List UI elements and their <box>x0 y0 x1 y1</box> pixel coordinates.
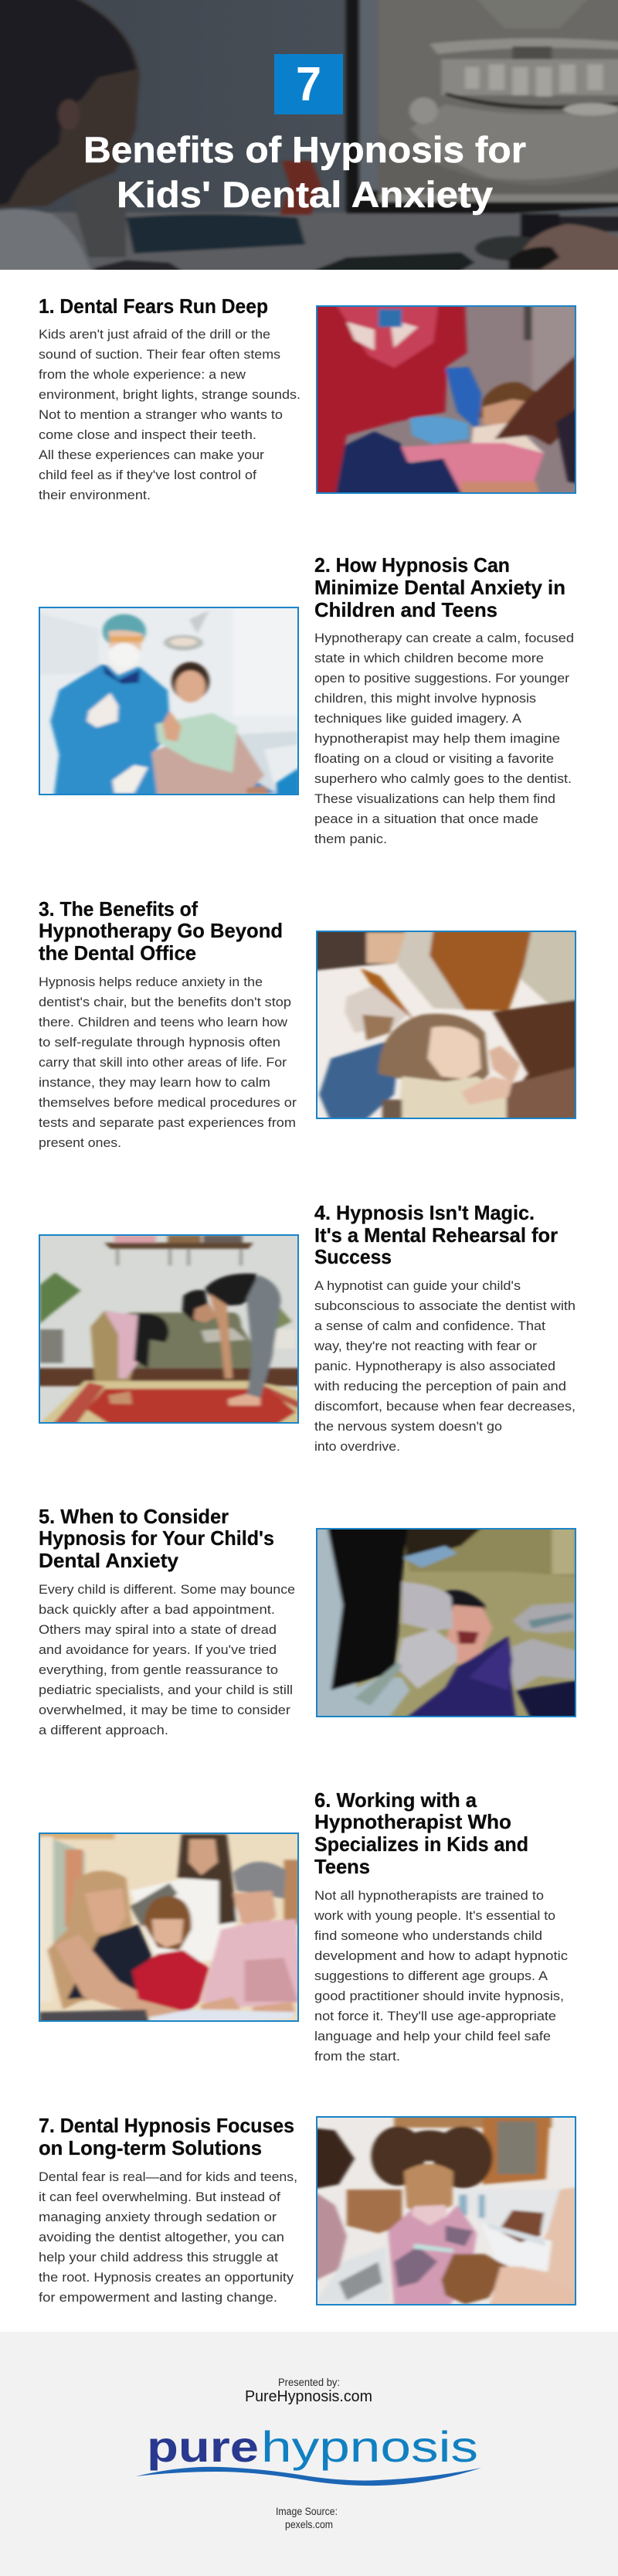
logo: pure hypnosis: pure <box>147 2422 259 2471</box>
section 3 <box>39 897 583 1150</box>
body text 6: development and how to adapt hypnotic <box>314 1948 569 1963</box>
body text 2: These visualizations can help them find <box>314 791 555 806</box>
body text 1: All these experiences can make your <box>39 447 264 462</box>
photo: mother comforting child <box>311 927 583 1123</box>
body text 4: subconscious to associate the dentist with <box>314 1298 576 1313</box>
body text 6: good practitioner should invite hypnosis, <box>314 1989 564 2003</box>
heading 3: 3. The Benefits of <box>39 897 198 920</box>
heading 5: Hypnosis for Your Child's <box>39 1526 274 1550</box>
photo: mother and child stretching <box>36 1234 304 1428</box>
presented by: Presented by: <box>278 2376 340 2388</box>
heading 6 <box>314 1788 528 1878</box>
heading 4: 4. Hypnosis Isn't Magic. <box>314 1201 535 1224</box>
body text 4: way, they're not reacting with fear or <box>314 1339 537 1353</box>
body text 1 <box>39 327 301 502</box>
heading 2: Minimize Dental Anxiety in <box>314 576 565 599</box>
body text 1: their environment. <box>39 488 151 502</box>
body text 5: a different approach. <box>39 1723 168 1737</box>
heading 4: Success <box>314 1245 392 1268</box>
body text 2: techniques like guided imagery. A <box>314 711 522 726</box>
heading 6: Hypnotherapist Who <box>314 1810 511 1833</box>
footer <box>0 2332 618 2576</box>
logo: pure hypnosis <box>136 2422 481 2486</box>
heading 5: 5. When to Consider <box>39 1505 229 1528</box>
body text 4: a sense of calm and confidence. That <box>314 1319 545 1333</box>
body text 3: instance, they may learn how to calm <box>39 1075 270 1090</box>
body text 7: help your child address this struggle at <box>39 2250 278 2265</box>
section 1 <box>39 294 579 502</box>
body text 7: the root. Hypnosis creates an opportunity <box>39 2270 294 2285</box>
body text 3 <box>39 975 297 1150</box>
heading 2: Children and Teens <box>314 598 497 621</box>
heading 6: Specializes in Kids and <box>314 1832 528 1856</box>
body text 6: from the start. <box>314 2049 400 2064</box>
body text 2: open to positive suggestions. For younger <box>314 671 569 686</box>
number badge: 7 <box>296 58 321 111</box>
body text 6: language and help your child feel safe <box>314 2029 551 2043</box>
body text 3: Hypnosis helps reduce anxiety in the <box>39 975 263 989</box>
photo: child with open mouth being treated <box>311 1525 579 1721</box>
heading 3 <box>39 897 283 965</box>
body text 2: superhero who calmly goes to the dentist. <box>314 771 572 786</box>
body text 1: sound of suction. Their fear often stems <box>39 347 280 362</box>
heading 4 <box>314 1201 558 1268</box>
body text 5: back quickly after a bad appointment. <box>39 1602 275 1617</box>
heading 3: the Dental Office <box>39 941 196 965</box>
heading 5: Dental Anxiety <box>39 1549 179 1572</box>
body text 7: avoiding the dentist altogether, you can <box>39 2230 284 2244</box>
body text 1: child feel as if they've lost control of <box>39 468 256 482</box>
body text 5: and avoidance for years. If you've tried <box>39 1642 277 1657</box>
section 5 <box>39 1505 579 1737</box>
body text 6 <box>314 1888 569 2064</box>
body text 6: work with young people. It's essential to <box>314 1908 555 1923</box>
heading 2: 2. How Hypnosis Can <box>314 553 510 577</box>
hero photo: child looking at dental x-ray <box>0 0 618 270</box>
heading 3: Hypnotherapy Go Beyond <box>39 919 283 942</box>
body text 4: the nervous system doesn't go <box>314 1419 502 1434</box>
presented by <box>245 2376 372 2405</box>
photo: child at dentist in red scrubs <box>311 303 579 497</box>
photo: girl brushing teeth <box>311 2115 579 2308</box>
heading 7: 7. Dental Hypnosis Focuses <box>39 2114 294 2137</box>
body text 2: them panic. <box>314 832 387 846</box>
body text 6: suggestions to different age groups. A <box>314 1969 548 1983</box>
photo: dentist and girl giving thumbs up <box>39 607 300 801</box>
body text 5: Others may spiral into a state of dread <box>39 1622 277 1637</box>
body text 2: Hypnotherapy can create a calm, focused <box>314 631 574 645</box>
body text 4: discomfort, because when fear decreases, <box>314 1399 576 1414</box>
body text 4: into overdrive. <box>314 1439 400 1454</box>
heading 5 <box>39 1505 274 1572</box>
section 7 <box>39 2114 579 2308</box>
body text 4: A hypnotist can guide your child's <box>314 1278 521 1293</box>
body text 5: pediatric specialists, and your child is still <box>39 1683 293 1697</box>
body text 3: themselves before medical procedures or <box>39 1095 297 1110</box>
body text 2: state in which children become more <box>314 651 544 665</box>
body text 3: there. Children and teens who learn how <box>39 1015 288 1029</box>
body text 5 <box>39 1582 295 1737</box>
body text 6: find someone who understands child <box>314 1928 542 1943</box>
logo: pure hypnosis: hypnosis <box>261 2422 478 2471</box>
image source: Image Source: <box>276 2506 338 2517</box>
body text 1: Not to mention a stranger who wants to <box>39 407 283 422</box>
body text 7: it can feel overwhelming. But instead of <box>39 2190 280 2204</box>
body text 2: children, this might involve hypnosis <box>314 691 536 706</box>
header banner <box>0 0 618 275</box>
body text 2: hypnotherapist may help them imagine <box>314 731 560 746</box>
body text 1: environment, bright lights, strange sounds. <box>39 387 301 402</box>
body text 7: for empowerment and lasting change. <box>39 2290 277 2305</box>
heading 2 <box>314 553 565 621</box>
heading 6: Teens <box>314 1855 370 1878</box>
heading 7 <box>39 2114 294 2159</box>
body text 6: Not all hypnotherapists are trained to <box>314 1888 544 1903</box>
body text 5: Every child is different. Some may bounce <box>39 1582 295 1597</box>
heading 4: It's a Mental Rehearsal for <box>314 1223 558 1247</box>
body text 2: floating on a cloud or visiting a favorite <box>314 751 554 766</box>
body text 1: from the whole experience: a new <box>39 367 246 382</box>
body text 2: peace in a situation that once made <box>314 812 538 826</box>
body text 3: dentist's chair, but the benefits don't stop <box>39 995 291 1009</box>
body text 3: carry that skill into other areas of life. For <box>39 1055 287 1070</box>
image source <box>276 2506 338 2530</box>
body text 3: to self-regulate through hypnosis often <box>39 1035 280 1050</box>
image source: pexels.com <box>285 2519 333 2530</box>
title: Kids' Dental Anxiety <box>117 174 493 215</box>
body text 3: tests and separate past experiences from <box>39 1115 296 1130</box>
body text 2 <box>314 631 574 846</box>
body text 5: everything, from gentle reassurance to <box>39 1662 278 1677</box>
heading 6: 6. Working with a <box>314 1788 477 1812</box>
body text 4: panic. Hypnotherapy is also associated <box>314 1359 555 1373</box>
heading 1: 1. Dental Fears Run Deep <box>39 294 268 318</box>
title: Benefits of Hypnosis for <box>83 129 526 170</box>
body text 1: Kids aren't just afraid of the drill or the <box>39 327 270 342</box>
body text 4 <box>314 1278 576 1454</box>
body text 5: overwhelmed, it may be time to consider <box>39 1703 290 1717</box>
body text 3: present ones. <box>39 1135 121 1150</box>
section 2 <box>39 553 574 846</box>
section 6 <box>36 1788 569 2064</box>
section 4 <box>36 1201 576 1454</box>
body text 4: with reducing the perception of pain and <box>314 1379 566 1393</box>
body text 7 <box>39 2169 297 2305</box>
body text 7: managing anxiety through sedation or <box>39 2210 277 2224</box>
body text 6: not force it. They'll use age-appropriate <box>314 2009 556 2023</box>
body text 7: Dental fear is real—and for kids and teens, <box>39 2169 297 2184</box>
number badge <box>274 54 343 114</box>
body text 1: come close and inspect their teeth. <box>39 427 256 442</box>
photo: family with child reading <box>36 1830 304 2025</box>
heading 7: on Long-term Solutions <box>39 2136 262 2159</box>
title <box>83 129 526 215</box>
presented by: PureHypnosis.com <box>245 2388 372 2405</box>
